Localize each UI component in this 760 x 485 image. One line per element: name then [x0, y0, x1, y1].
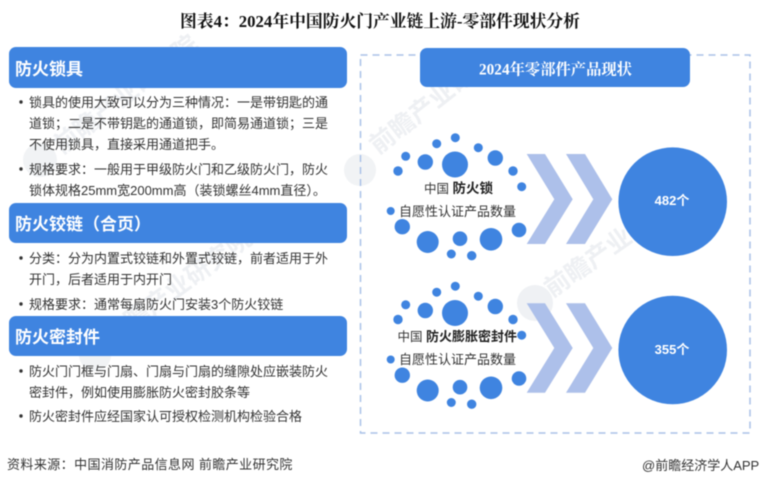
watermark: logos and company name: 前瞻产业研究院 [99, 224, 257, 350]
heading: fire hinges: 防火铰链（合页） [15, 214, 151, 234]
arrow: double chevron, fire locks [527, 154, 612, 244]
text block: lock usage and specifications: 道锁；二是不带钥匙的通道锁，即简易通道锁；三是 [29, 116, 328, 132]
watermark: logos and company name: 前瞻产业研究院 [48, 30, 204, 160]
text block: hinge types and specifications [19, 251, 328, 312]
text block: lock usage and specifications: 不使用锁具，直接采用通道把手。 [29, 137, 224, 152]
circle: 482 products [618, 147, 727, 256]
credit: @前瞻经济学人APP [642, 458, 759, 473]
panel: fire locks [9, 47, 347, 198]
heading: fire locks [9, 47, 347, 88]
watermark: logos and company name: 前瞻产业研究院 [539, 180, 699, 303]
heading: fire seals [9, 316, 347, 356]
arrow: double chevron, fire expansion seals [527, 303, 612, 393]
text block: lock usage and specifications: 锁具的使用大致可以分为三种情况：一是带钥匙的通 [29, 95, 328, 110]
text block: seal installation and inspection [19, 364, 328, 424]
title: 图表4：2024年中国防火门产业链上游-零部件现状分析 [180, 11, 580, 31]
label: fire expansion seal certified products [398, 329, 517, 367]
panel: fire seals [9, 316, 347, 424]
watermark: logos and company name [23, 30, 699, 371]
text block: seal installation and inspection: 密封件，例如使用膨胀防火密封胶条等 [29, 385, 250, 400]
label: fire expansion seal certified products: 自愿性认证产品数量 [399, 352, 516, 367]
icon: dot ring, fire expansion seals [387, 282, 526, 409]
text block: hinge types and specifications: 开门，后者适用于内开门 [29, 272, 172, 287]
text block: lock usage and specifications [19, 95, 328, 198]
panel: fire hinges [9, 203, 347, 312]
text block: seal installation and inspection: 防火密封件应经国家认可授权检测机构检验合格 [29, 409, 302, 424]
label: fire lock certified products [399, 180, 516, 219]
heading: fire hinges [9, 203, 347, 243]
heading: fire locks: 防火锁具 [15, 59, 83, 79]
heading: 2024 product status: 2024年零部件产品现状 [479, 60, 633, 78]
text block: hinge types and specifications: 分类：分为内置式铰链和外置式铰链，前者适用于外 [29, 251, 328, 266]
circle: 355 products: 355个 [655, 342, 689, 357]
label: fire lock certified products: 自愿性认证产品数量 [399, 204, 516, 219]
heading: fire seals: 防火密封件 [15, 327, 100, 347]
source note: 资料来源：中国消防产品信息网 前瞻产业研究院 [7, 457, 293, 472]
heading: 2024 product status [420, 48, 690, 87]
icon: dot ring, fire locks [387, 133, 526, 260]
circle: 355 products [618, 296, 727, 404]
label: fire expansion seal certified products: 中国 防火膨胀密封件 [398, 329, 517, 344]
circle: 482 products: 482个 [655, 193, 689, 208]
text block: seal installation and inspection: 防火门门框与门扇、门扇与门扇的缝隙处应嵌装防火 [29, 364, 328, 379]
label: fire lock certified products: 中国 防火锁 [424, 180, 493, 196]
text block: hinge types and specifications: 规格要求：通常每扇防火门安装3个防火铰链 [29, 297, 283, 312]
watermark: logos and company name: 前瞻产业研究 [364, 45, 500, 160]
text block: lock usage and specifications: 锁体规格25mm宽200mm高（装锁螺丝4mm直径）。 [29, 183, 326, 198]
panel: dashed frame for product status [360, 55, 750, 433]
text block: lock usage and specifications: 规格要求：一般用于甲级防火门和乙级防火门，防火 [29, 162, 328, 177]
